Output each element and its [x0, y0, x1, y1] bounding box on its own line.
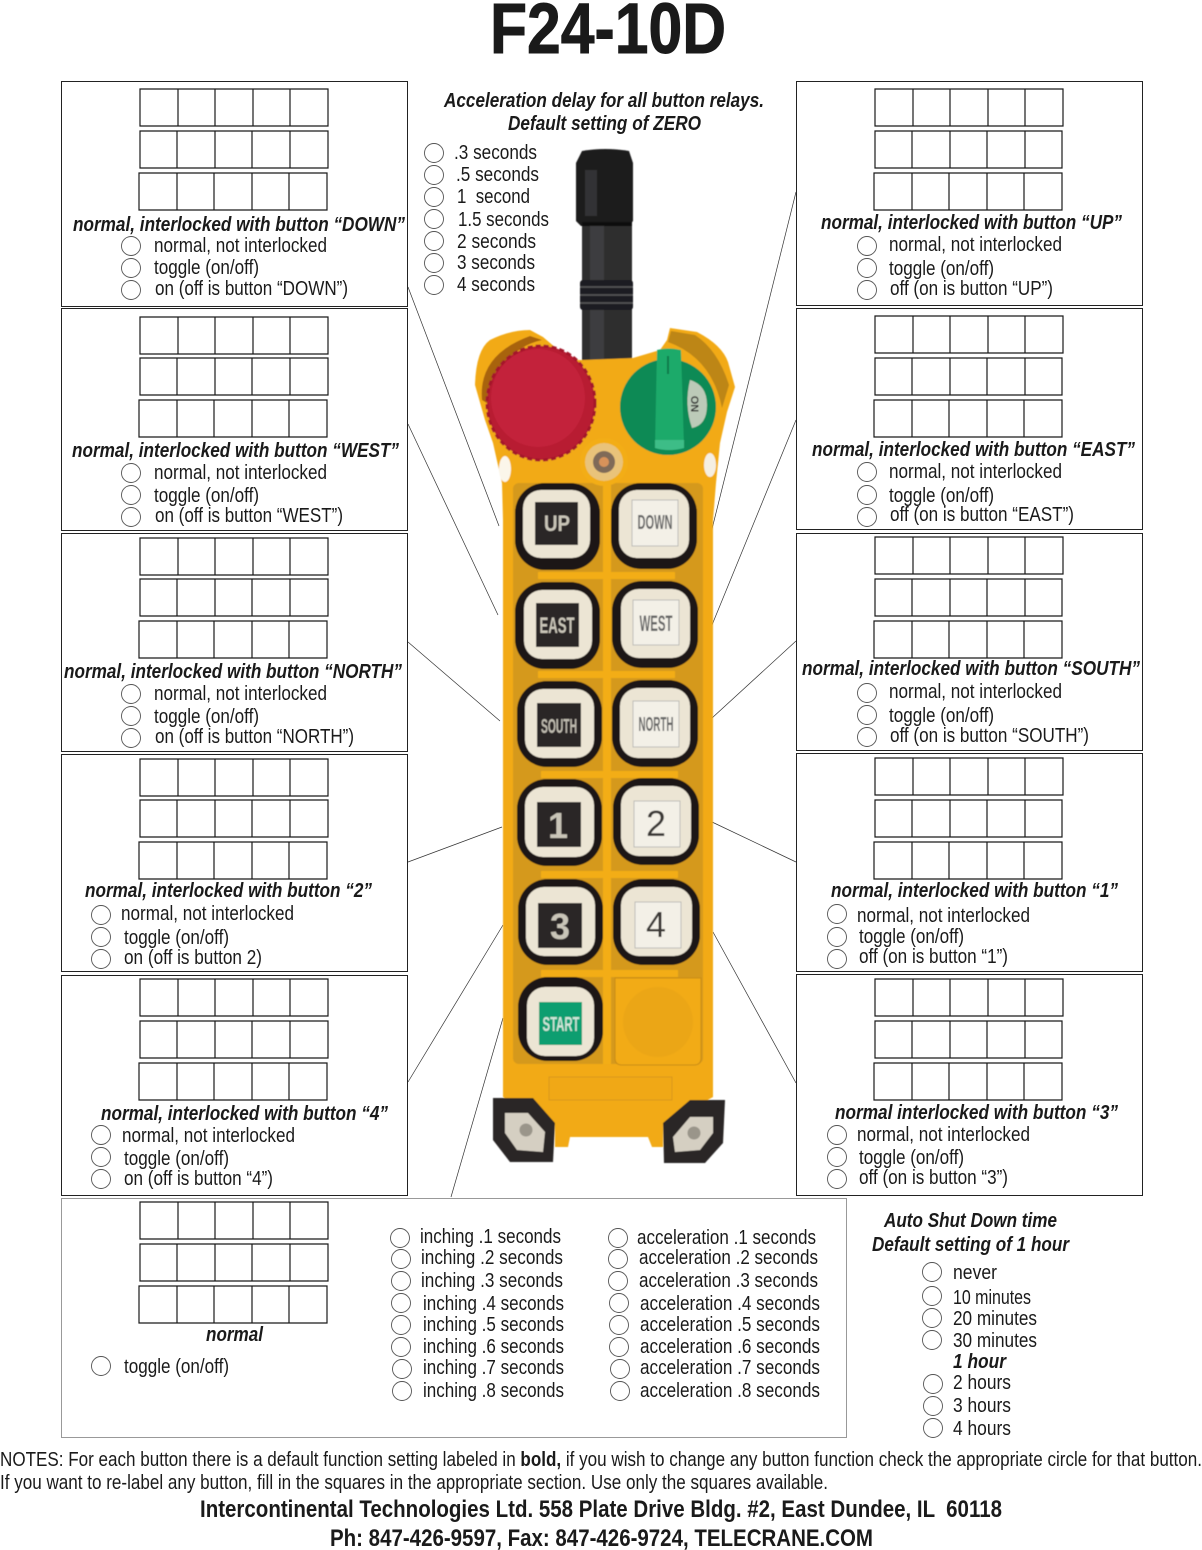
acceleration options: acceleration .7 seconds [640, 1357, 820, 1379]
antenna [576, 149, 633, 364]
acceleration delay heading: Acceleration delay for all button relays. [443, 90, 764, 112]
acceleration delay heading: Default setting of ZERO [508, 113, 701, 135]
acceleration options: acceleration .5 seconds [640, 1314, 820, 1336]
panel: button 1 [796, 754, 1142, 972]
label grid [139, 979, 328, 1100]
options: off (on is button “EAST”) [890, 504, 1074, 526]
heading: normal, interlocked with button “EAST” [812, 439, 1135, 461]
options [858, 461, 1074, 526]
right bottom bracket [663, 1100, 725, 1163]
panel: START button functions [62, 1198, 846, 1438]
button START [518, 977, 603, 1061]
auto shut down heading: Default setting of 1 hour [872, 1234, 1070, 1256]
contact footer [200, 1496, 1002, 1550]
heading: normal, interlocked with button “4” [101, 1103, 388, 1125]
acceleration options [608, 1227, 820, 1402]
options: normal, not interlocked [857, 905, 1030, 927]
ear shadow right [668, 331, 729, 408]
options: on (off is button “4”) [124, 1168, 273, 1190]
options: normal, not interlocked [122, 1125, 295, 1147]
button EAST [515, 582, 600, 669]
button NORTH [612, 680, 698, 767]
button WEST [612, 581, 698, 668]
label grid [139, 759, 328, 879]
options: off (on is button “3”) [859, 1167, 1008, 1189]
acceleration delay options: .3 seconds [454, 142, 537, 164]
panel: button DOWN [62, 82, 408, 306]
panel: button 4 [62, 976, 408, 1196]
label grid [874, 979, 1063, 1100]
label grid [874, 89, 1063, 210]
label grid [139, 538, 328, 658]
inching options [390, 1226, 564, 1402]
options: toggle (on/off) [154, 485, 259, 507]
button DOWN [611, 483, 697, 569]
acceleration delay options: 3 seconds [457, 252, 535, 274]
options [92, 903, 294, 969]
options [122, 683, 354, 748]
heading: normal, interlocked with button “SOUTH” [802, 658, 1140, 680]
button recess [513, 483, 703, 1064]
auto shut down options: 30 minutes [953, 1330, 1037, 1352]
options: normal, not interlocked [154, 235, 327, 257]
options [122, 462, 343, 527]
auto shut down options: 1 hour [953, 1351, 1007, 1373]
auto shut down options: 10 minutes [953, 1287, 1031, 1309]
button 1: 1 [548, 805, 568, 846]
indicator light [580, 438, 628, 486]
heading: normal, interlocked with button “2” [85, 880, 372, 902]
notes: If you want to re-label any button, fill in the squares in the appropriate section. Use only the squares available. [0, 1472, 828, 1494]
ear shadow left [482, 336, 542, 405]
options: normal, not interlocked [889, 681, 1062, 703]
heading: normal, interlocked with button “DOWN” [73, 214, 405, 236]
panel: button 2 [62, 754, 408, 972]
options: off (on is button “1”) [859, 946, 1008, 968]
label grid [139, 89, 328, 210]
recess ribs [538, 483, 678, 1064]
red stop button [487, 346, 595, 460]
acceleration delay options: 1.5 seconds [458, 209, 549, 231]
panel: button EAST [796, 308, 1142, 530]
inching options: inching .2 seconds [421, 1247, 563, 1269]
panel: button NORTH [62, 534, 408, 752]
connector lines [408, 192, 796, 1197]
toggle option: toggle (on/off) [124, 1356, 229, 1378]
options: toggle (on/off) [154, 257, 259, 279]
remote control [475, 149, 735, 1163]
panel: button 3 [796, 974, 1142, 1196]
button SOUTH: SOUTH [541, 716, 577, 738]
inching options: inching .7 seconds [423, 1357, 564, 1379]
acceleration options: acceleration .1 seconds [637, 1227, 816, 1249]
auto shut down options: 3 hours [953, 1395, 1011, 1417]
heading: normal, interlocked with button “1” [831, 880, 1118, 902]
acceleration options: acceleration .3 seconds [639, 1270, 818, 1292]
button START: START [542, 1014, 580, 1036]
body [475, 328, 735, 1147]
options: on (off is button “WEST”) [155, 505, 343, 527]
label grid [874, 316, 1063, 437]
auto shut down heading [872, 1210, 1070, 1256]
acceleration options: acceleration .4 seconds [640, 1293, 820, 1315]
options: on (off is button “DOWN”) [155, 278, 348, 300]
button 1 [517, 779, 602, 866]
left bottom bracket [493, 1098, 555, 1162]
heading: normal [206, 1324, 263, 1346]
options: toggle (on/off) [889, 705, 994, 727]
label grid [874, 537, 1063, 658]
options [122, 235, 348, 300]
green key switch: ON [688, 396, 700, 412]
options: on (off is button 2) [124, 947, 262, 969]
options: toggle (on/off) [859, 926, 964, 948]
heading: normal, interlocked with button “WEST” [72, 440, 399, 462]
heading: normal, interlocked with button “NORTH” [64, 661, 402, 683]
auto shut down heading: Auto Shut Down time [883, 1210, 1057, 1232]
button NORTH: NORTH [638, 714, 674, 736]
options: on (off is button “NORTH”) [155, 726, 354, 748]
options: off (on is button “SOUTH”) [890, 725, 1089, 747]
options: normal, not interlocked [154, 462, 327, 484]
button 2 [613, 778, 699, 865]
options: normal, not interlocked [889, 461, 1062, 483]
auto shut down options: never [953, 1262, 997, 1284]
button UP: UP [544, 511, 570, 536]
heading: normal, interlocked with button “UP” [821, 212, 1122, 234]
acceleration delay options: 4 seconds [457, 274, 535, 296]
acceleration delay heading [443, 90, 764, 135]
acceleration options: acceleration .6 seconds [640, 1336, 820, 1358]
auto shut down options [922, 1262, 1037, 1440]
button EAST: EAST [540, 613, 575, 638]
options: toggle (on/off) [124, 1148, 229, 1170]
inching options: inching .3 seconds [421, 1270, 563, 1292]
button 2: 2 [646, 803, 666, 844]
acceleration options: acceleration .8 seconds [640, 1380, 820, 1402]
inching options: inching .5 seconds [423, 1314, 564, 1336]
options: normal, not interlocked [889, 234, 1062, 256]
options: normal, not interlocked [857, 1124, 1030, 1146]
label grid [874, 758, 1063, 879]
acceleration options: acceleration .2 seconds [639, 1247, 818, 1269]
options: normal, not interlocked [154, 683, 327, 705]
options [828, 904, 1030, 968]
panel: button SOUTH [796, 534, 1142, 750]
toggle option [92, 1356, 229, 1378]
acceleration delay options: 1 second [457, 186, 530, 208]
inching options: inching .8 seconds [423, 1380, 564, 1402]
auto shut down options: 2 hours [953, 1372, 1011, 1394]
acceleration delay options: 2 seconds [457, 231, 536, 253]
options: toggle (on/off) [889, 258, 994, 280]
options [858, 234, 1062, 300]
options: toggle (on/off) [889, 485, 994, 507]
label recess [549, 1077, 672, 1100]
green key switch [620, 348, 716, 455]
options: toggle (on/off) [124, 927, 229, 949]
button SOUTH [517, 681, 602, 767]
options: toggle (on/off) [859, 1147, 964, 1169]
button 4 [613, 879, 700, 965]
button UP [515, 483, 600, 570]
inching options: inching .6 seconds [423, 1336, 564, 1358]
button WEST: WEST [640, 611, 673, 636]
heading: normal interlocked with button “3” [835, 1102, 1118, 1124]
contact footer: Intercontinental Technologies Ltd. 558 Plate Drive Bldg. #2, East Dundee, IL 60118 [200, 1496, 1002, 1523]
options: normal, not interlocked [121, 903, 294, 925]
button 3: 3 [550, 906, 570, 947]
options [92, 1125, 295, 1190]
label grid [139, 1202, 328, 1323]
auto shut down options: 20 minutes [953, 1308, 1037, 1330]
auto shut down options: 4 hours [953, 1418, 1011, 1440]
label grid [139, 317, 328, 437]
side openings [499, 453, 716, 482]
options [858, 681, 1089, 747]
button DOWN: DOWN [638, 512, 672, 534]
panel: button UP [796, 82, 1142, 306]
options: off (on is button “UP”) [890, 278, 1053, 300]
blank button cover [615, 978, 701, 1065]
button 3 [518, 879, 603, 965]
button 4: 4 [646, 904, 666, 945]
panel: button WEST [62, 308, 408, 530]
notes [0, 1449, 1202, 1494]
acceleration delay options [424, 142, 549, 296]
options [828, 1124, 1030, 1189]
acceleration delay options: .5 seconds [456, 164, 539, 186]
inching options: inching .1 seconds [420, 1226, 561, 1248]
options: toggle (on/off) [154, 706, 259, 728]
inching options: inching .4 seconds [423, 1293, 564, 1315]
